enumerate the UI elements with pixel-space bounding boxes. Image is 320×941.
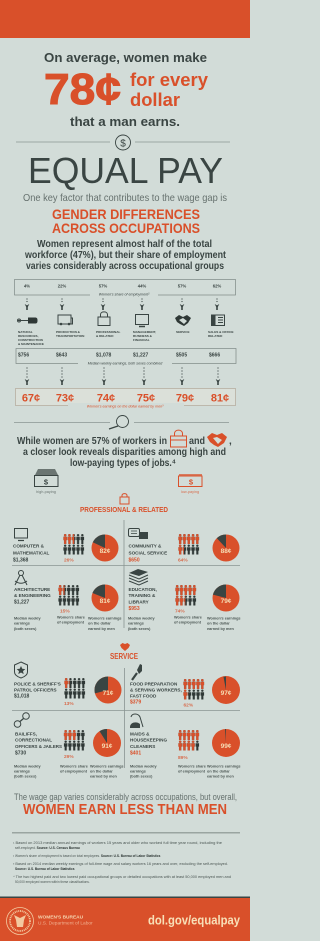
occupation name <box>130 682 182 706</box>
occupation name: FAST FOOD <box>130 694 157 698</box>
panel: women's share of employment: 62% <box>213 284 221 288</box>
occupation name <box>130 732 167 756</box>
percent: 74% <box>175 608 185 614</box>
chart key: on the dollar <box>88 622 111 626</box>
panel: median weekly earnings: $505 <box>176 352 187 358</box>
icon: handshake orange <box>207 433 227 447</box>
occupation name <box>14 587 51 606</box>
icon: vacuum <box>130 714 143 728</box>
icon: chat bubbles <box>128 528 148 539</box>
occupational group label: sales: RELATED <box>208 334 223 338</box>
for every dollar <box>130 70 208 110</box>
chart key: Median weekly <box>128 616 155 620</box>
icon: spatula <box>132 664 142 680</box>
headline: 78 cents statistic <box>44 50 208 129</box>
panel: women's earnings on the dollar: 81¢ <box>211 392 229 404</box>
disparities text block <box>17 430 232 469</box>
workforce text block <box>24 239 227 272</box>
title: Equal Pay: EQUAL PAY <box>28 150 223 191</box>
panel: women's earnings on the dollar: 75¢ <box>137 392 155 404</box>
bureau name <box>38 914 93 926</box>
panel: median weekly earnings: $1,078 <box>96 352 112 358</box>
chart key: of employment <box>57 620 85 624</box>
workforce text block: Women represent almost half of the total <box>37 239 212 250</box>
pie chart 71 cents: 71¢ <box>103 690 114 697</box>
legend: low-paying <box>178 474 202 494</box>
people chart 26% <box>63 534 84 555</box>
disparities text block: , <box>229 436 232 447</box>
occupation name: PATROL OFFICERS <box>14 688 57 692</box>
conclusion text <box>14 792 237 818</box>
icon: handcuffs <box>14 713 29 727</box>
occupational group label: management <box>133 330 156 342</box>
occupational group label: production: TRANSPORTATION <box>56 334 85 338</box>
pie chart 97 cents: 97¢ <box>221 690 232 697</box>
chart key: Women's earnings <box>207 764 241 768</box>
occupational group label: management: MANAGEMENT, <box>133 330 156 334</box>
disparities text block: While women are 57% of workers in <box>17 436 167 447</box>
occupation name: HOUSEKEEPING <box>130 738 167 742</box>
occupation name: $730 <box>15 750 26 756</box>
people chart 89% <box>178 730 200 751</box>
chart key: Women's earnings <box>88 616 122 620</box>
chart key: of employment <box>60 770 88 774</box>
chart key: Median weekly <box>14 764 41 768</box>
occupational group label: sales: SALES & OFFICE <box>208 330 234 334</box>
icon: small handbag <box>120 494 129 504</box>
chart key: Women's share <box>57 616 85 620</box>
occupational group label: natural resources <box>18 330 44 346</box>
chart key <box>14 764 124 778</box>
chart key <box>14 616 122 631</box>
people chart 29% <box>64 730 85 751</box>
panel: education, training & library <box>128 569 241 631</box>
section heading: professional & related <box>80 494 168 514</box>
icon: handshake <box>175 315 191 326</box>
pie chart 99 cents: 99¢ <box>221 743 232 750</box>
occupation name: OFFICERS & JAILERS <box>15 744 62 749</box>
occupation name: BAILIFFS, <box>15 732 37 736</box>
occupational group label: management: BUSINESS & <box>133 334 153 338</box>
pie chart 91 cents: 91¢ <box>102 743 113 750</box>
occupational group label: natural resources: & MAINTENANCE <box>18 342 44 346</box>
occupation name: CORRECTIONAL <box>15 738 52 742</box>
footer band <box>0 896 250 941</box>
occupation name: & ENGINEERING <box>14 593 51 598</box>
occupation name: & SERVING WORKERS, <box>130 688 182 692</box>
chart key: earnings <box>128 622 144 626</box>
section heading: professional & related: PROFESSIONAL & RELATED <box>80 505 168 514</box>
occupation name: COMMUNITY & <box>128 544 162 548</box>
occupation name: FOOD PREPARATION <box>130 682 178 686</box>
occupation name: $379 <box>130 700 141 706</box>
occupational group label: production <box>56 330 85 338</box>
chart key: earned by men <box>90 774 117 778</box>
panel: women's earnings on the dollar: Women's earnings on the dollar earned by men³ <box>87 404 164 408</box>
arrows row 2 <box>25 367 220 385</box>
panel: community & social service <box>128 528 240 564</box>
bureau name: U.S. Department of Labor <box>38 920 93 926</box>
icon: truck <box>58 315 72 325</box>
occupation name <box>128 587 157 612</box>
subtitle: gender differences <box>52 206 200 236</box>
percent: 62% <box>184 702 194 708</box>
chart key: on the dollar <box>207 622 230 626</box>
occupational group label: management: FINANCIAL <box>133 338 150 342</box>
occupational group label: sales <box>208 330 234 338</box>
headline line 1: On average, women make <box>44 50 207 65</box>
subtitle: gender differences: ACROSS OCCUPATIONS <box>52 220 200 236</box>
occupational group label: professional <box>96 330 121 338</box>
icon: handbag orange <box>170 430 186 447</box>
panel: women's share of employment: 22% <box>58 284 66 288</box>
percent: 15% <box>60 608 70 614</box>
occupation name: $953 <box>128 606 140 612</box>
section heading: service <box>110 643 139 661</box>
pie chart 79 cents: 79¢ <box>221 598 232 605</box>
panel: women's share of employment: 4% <box>24 284 30 288</box>
occupation name: POLICE & SHERIFF'S <box>14 682 61 686</box>
legend: high-paying: high-paying <box>36 490 56 494</box>
chart key: earned by men <box>88 627 115 631</box>
divider with dollar coin icon: $ <box>120 138 126 150</box>
occupation name: TRAINING & <box>128 593 156 598</box>
panel: women's earnings on the dollar: 67¢ <box>22 392 40 404</box>
panel: women's share of employment: 57% <box>178 284 186 288</box>
panel: police & sheriff's patrol officers <box>14 662 122 707</box>
occupation name: SOCIAL SERVICE <box>128 550 167 556</box>
percent: 29% <box>64 754 74 760</box>
icon: shovel <box>18 318 38 324</box>
occupation name <box>13 544 50 564</box>
divider with dollar coin icon <box>16 135 230 150</box>
chart key: Women's share <box>60 764 88 768</box>
percent: 13% <box>64 701 74 707</box>
arrows row 1 <box>25 298 219 310</box>
pie chart 81 cents: 81¢ <box>100 598 111 605</box>
footnotes: ³ Based on 2014 median weekly earnings of full-time wage and salary workers 16 years and over, excluding the self-employed. <box>13 862 228 866</box>
legend: high-paying <box>34 469 58 494</box>
disparities text block: and <box>189 436 205 447</box>
panel: women's share of employment: Women's share of employment² <box>99 292 150 296</box>
chart key: Women's share <box>174 616 202 620</box>
footnotes: 50,000 employed women within these classifications. <box>15 880 90 884</box>
icon: books <box>129 569 148 585</box>
disparities text block: low-paying types of jobs.⁴ <box>70 458 176 469</box>
people chart 13% <box>64 678 86 699</box>
top orange band <box>0 0 250 38</box>
occupation name <box>128 544 167 564</box>
panel: women's earnings on the dollar: 74¢ <box>97 392 115 404</box>
footnotes: Source: U.S. Bureau of Labor Statistics <box>15 867 75 871</box>
occupation name <box>14 682 61 700</box>
chart key: on the dollar <box>90 770 113 774</box>
chart key: earnings <box>14 622 30 626</box>
occupational group label: natural resources: NATURAL <box>18 330 33 334</box>
section heading: service: SERVICE <box>110 652 139 661</box>
panel: bailiffs, correctional officers & jailers <box>14 713 124 778</box>
chart key: Women's earnings <box>207 616 241 620</box>
panel: women's share of employment: 57% <box>99 284 107 288</box>
icon: monitor <box>14 528 28 540</box>
occupation name <box>15 732 62 756</box>
icon: small handshake <box>120 643 130 651</box>
footnotes: ¹ Based on 2013 median annual earnings of workers 15 years and older who worked full time year round, including the <box>13 841 222 845</box>
people chart 15% <box>58 585 80 606</box>
pie chart 82 cents: 82¢ <box>100 548 111 555</box>
icon: handbag <box>98 312 110 326</box>
chart key: (both sexes) <box>14 627 37 631</box>
panel: women's earnings on the dollar <box>16 388 236 409</box>
page background <box>0 0 250 941</box>
panel: median weekly earnings: $643 <box>56 352 67 358</box>
occupation name: $1,018 <box>14 694 30 700</box>
chart key <box>128 616 241 631</box>
icon: department of labor seal <box>6 908 34 934</box>
headline last line: that a man earns. <box>70 114 180 129</box>
occupational group label: professional: & RELATED <box>96 334 114 338</box>
legend: low-paying: $ <box>189 478 194 486</box>
big number 78 cents: 78¢ <box>44 65 121 114</box>
percent: 89% <box>178 755 188 761</box>
disparities text block: a closer look reveals disparities among high and <box>23 447 226 458</box>
occupational group label: natural resources: CONSTRUCTION <box>18 338 44 342</box>
panel: women's earnings on the dollar: 73¢ <box>56 392 74 404</box>
chart key <box>130 764 241 778</box>
panel: women's share of employment <box>14 280 236 297</box>
occupation name: ARCHITECTURE <box>14 587 50 592</box>
chart key: (both sexes) <box>128 627 151 631</box>
pie chart 88 cents: 88¢ <box>221 548 232 555</box>
occupation name: MAIDS & <box>130 732 150 736</box>
divider with magnifier icon <box>14 416 229 429</box>
occupation name: $1,368 <box>13 558 29 564</box>
panel: computer & mathematical <box>13 528 118 564</box>
panel: median weekly earnings <box>16 348 236 366</box>
chart key: Women's share <box>178 764 206 768</box>
panel: median weekly earnings: Median weekly earnings, both sexes combined <box>88 362 163 366</box>
footnotes <box>13 841 231 884</box>
footnotes: ⁴ The two highest paid and two lowest paid occupational groups or detailed occupations with at least 50,000 employed men and <box>13 875 231 879</box>
occupational group label: professional: PROFESSIONAL <box>96 330 121 334</box>
occupational group label: service: SERVICE <box>176 330 190 334</box>
chart key: Women's earnings <box>90 764 124 768</box>
occupation name: $1,227 <box>14 600 30 606</box>
intro sentence: One key factor that contributes to the wage gap is <box>23 192 227 204</box>
occupational groups icons and names <box>18 312 234 346</box>
chart key: Median weekly <box>130 764 157 768</box>
bureau name: WOMEN'S BUREAU <box>38 914 84 920</box>
people chart 64% <box>178 534 200 555</box>
occupation name: CLEANERS <box>130 744 155 749</box>
subtitle: gender differences: GENDER DIFFERENCES <box>52 206 200 222</box>
people chart 74% <box>175 585 196 606</box>
occupation name: EDUCATION, <box>128 587 157 592</box>
percent: 64% <box>178 558 188 564</box>
occupation name: LIBRARY <box>128 600 149 604</box>
conclusion text: WOMEN EARN LESS THAN MEN <box>23 802 227 818</box>
people chart 62% <box>183 679 204 700</box>
chart key: of employment <box>174 620 202 624</box>
chart key: of employment <box>178 770 206 774</box>
chart key: earnings <box>130 770 146 774</box>
icon: compass <box>15 570 27 585</box>
chart key: on the dollar <box>207 770 230 774</box>
footnotes: ² Women's share of employment is based on total employees. Source: U.S. Bureau of Labor Statistics <box>13 854 161 858</box>
chart key: (both sexes) <box>14 774 37 778</box>
occupational group label: natural resources: RESOURCES, <box>18 334 39 338</box>
panel: median weekly earnings: $756 <box>18 352 29 358</box>
chart key: (both sexes) <box>130 774 153 778</box>
panel: maids & housekeeping cleaners <box>130 714 241 778</box>
occupational group label: production: PRODUCTION & <box>56 330 81 334</box>
chart key: earned by men <box>207 774 234 778</box>
occupation name: $650 <box>128 558 140 564</box>
icon: telephone <box>212 314 224 326</box>
for every dollar: for every <box>130 70 208 90</box>
for every dollar: dollar <box>130 90 180 110</box>
footnotes: self-employed. Source: U.S. Census Bureau <box>15 846 80 850</box>
legend: high-paying: $ <box>44 478 49 486</box>
percent: 26% <box>64 558 74 564</box>
panel: women's earnings on the dollar: 79¢ <box>176 392 194 404</box>
chart key: earned by men <box>207 627 234 631</box>
icon: badge <box>14 662 28 678</box>
occupation name: COMPUTER & <box>13 544 45 548</box>
panel: architecture & engineering <box>14 570 122 631</box>
icon: monitor <box>136 314 148 326</box>
chart key: earnings <box>14 770 30 774</box>
chart key: Median weekly <box>14 616 41 620</box>
workforce text block: workforce (47%), but their share of employment <box>24 250 227 261</box>
panel: food preparation & serving <box>130 664 240 708</box>
panel: women's share of employment: 44% <box>138 284 146 288</box>
occupation name: MATHEMATICAL <box>13 550 50 556</box>
panel: median weekly earnings: $666 <box>209 352 220 358</box>
panel: median weekly earnings: $1,227 <box>133 352 149 358</box>
workforce text block: varies considerably across occupational groups <box>26 261 224 272</box>
legend: low-paying: low-paying <box>181 490 199 494</box>
occupation name: $401 <box>130 750 141 756</box>
